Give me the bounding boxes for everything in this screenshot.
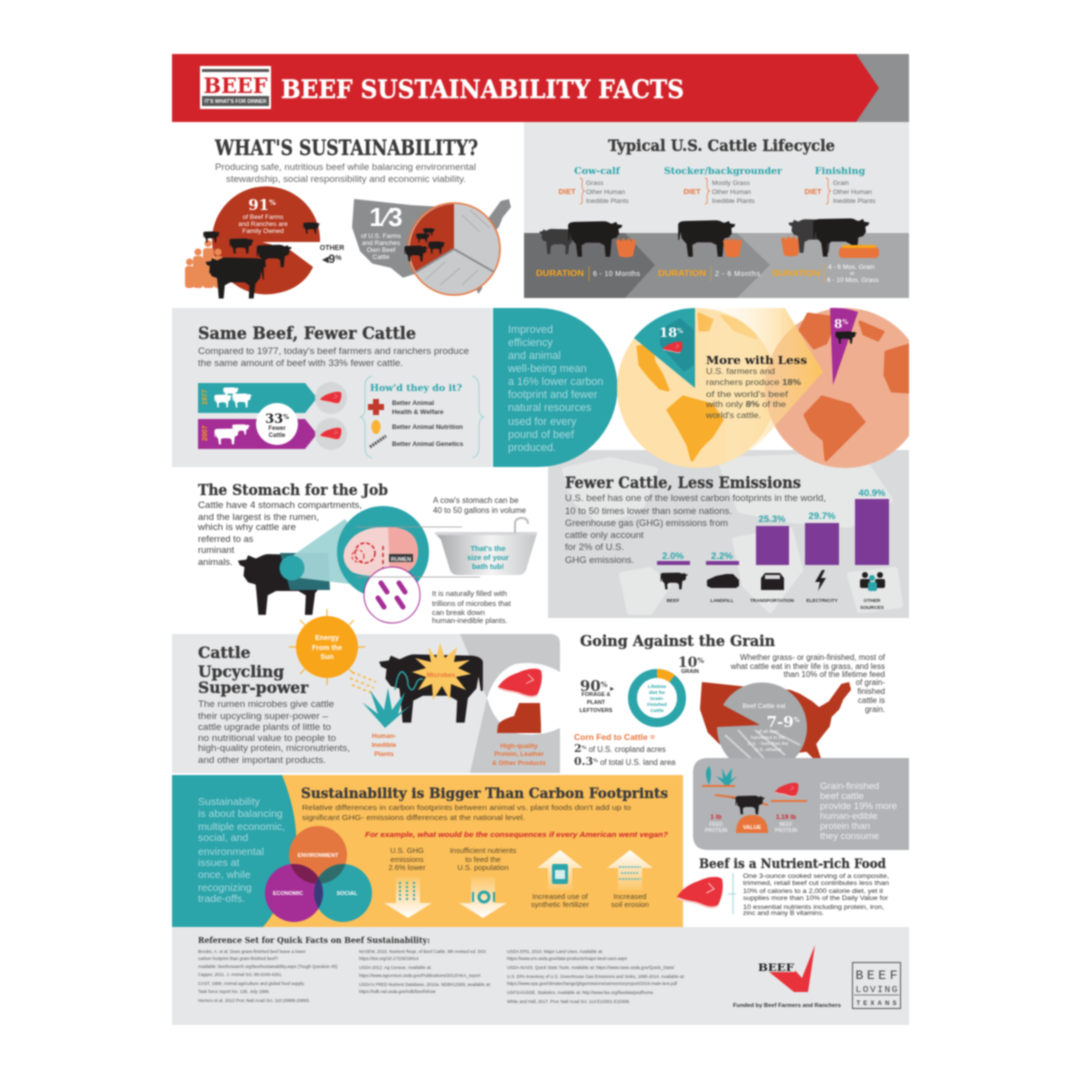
donut chart: 90 (580, 677, 601, 695)
body text: cattle upgrade plants of little to (198, 722, 331, 732)
body text: of grain- (856, 678, 885, 687)
teal bracket (728, 873, 736, 914)
icon: bathtub: size of your (467, 553, 509, 562)
body text: Greenhouse gas (GHG) emissions from (565, 518, 728, 529)
references column 1: Capper, 2011. J. Animal Sci. 89:4249-4261. (198, 972, 282, 977)
callout: how'd they do it: Better Animal (392, 400, 434, 407)
donut chart: FORAGE & (581, 692, 611, 698)
icon: cow with rumen zoom (238, 506, 429, 623)
stage: stocker/backgrounder: DIET (683, 187, 701, 196)
stage: finishing: Finishing (815, 166, 865, 177)
consequence: fertilizer: synthetic fertilizer (531, 900, 589, 909)
right globe 8% of cattle: % (842, 319, 848, 326)
map: one third own beef cattle: 1⁄3 (369, 202, 403, 232)
bar chart: GHG emissions (657, 488, 889, 565)
map: 7-9% of life: U.S. ethanol (755, 747, 781, 753)
label: products: & Other Products (492, 760, 546, 767)
icon: scale with cow (702, 766, 807, 834)
stats: corn fed to cattle: % (582, 745, 587, 751)
panel: what's sustainability (185, 135, 511, 299)
comparison bars: 33 (265, 412, 283, 427)
references column 1: Available: beefresearch.org/beefsustainability.aspx (Tough Question #5) (198, 964, 338, 969)
logo: beef loving texans: TEXANS (856, 1001, 896, 1007)
label: other 9%: OTHER (320, 245, 344, 252)
callout: how'd they do it: How'd they do it? (370, 383, 462, 394)
map: 7-9% of life (700, 682, 851, 773)
logo: BEEF It's What's For Dinner (200, 66, 271, 109)
body text: Whether grass- or grain-finished, most of (740, 653, 886, 662)
title: BEEF SUSTAINABILITY FACTS (281, 75, 684, 104)
text block: teal: is about balancing (198, 808, 283, 820)
map: 7-9% of life: of all corn (758, 729, 779, 735)
microbes circle (364, 567, 420, 623)
body text: Relative differences in carbon footprints between animal vs. plant foods don't add up to (302, 803, 631, 812)
globes: more with less (617, 308, 925, 468)
intro text: Producing safe, nutritious beef while balancing environmental (215, 162, 476, 172)
icon: scale with cow: FEED (709, 822, 723, 828)
icons and labels: ELECTRICITY (806, 598, 839, 604)
body text: animals. (198, 557, 233, 567)
consequence: fertilizer: Increased use of (532, 892, 589, 901)
stage: cow-calf: DIET (558, 187, 576, 196)
icon: grass plant (362, 688, 411, 728)
body text: 10% of calories to a 2,000 calorie diet, yet it (743, 888, 883, 895)
callout: how'd they do it (360, 376, 484, 458)
panel: going against the grain (574, 632, 909, 850)
icon: scale with cow: VALUE (743, 825, 761, 831)
references column 2: https://www.agcensus.usda.gov/Publications/2012/AKA_report (359, 973, 481, 978)
heading: what's sustainability: WHAT'S SUSTAINABILITY? (214, 135, 478, 160)
heading: Sustainability is Bigger Than Carbon Footprints (301, 786, 668, 802)
right globe 8% of cattle: 8 (834, 317, 842, 331)
body text: what cattle eat in their life is grass, and less (730, 662, 885, 671)
world map background (565, 455, 900, 612)
question: For example, what would be the consequences if every American went vegan? (365, 830, 668, 839)
panel: same beef, fewer cattle (172, 308, 492, 467)
text block: teal: once, while (198, 869, 251, 881)
comparison bars: 1977 (202, 389, 209, 405)
body text: for 2% of U.S. (565, 542, 624, 553)
stats: corn fed to cattle: 0.3 (574, 755, 598, 768)
consequence: soil erosion: soil erosion (611, 900, 649, 909)
consequence: insufficient nutrients: U.S. population (457, 863, 509, 872)
references column 2: https://ndb.nal.usda.gov/ndb/beef/show (359, 989, 436, 994)
references column 3: U.S. EPA Inventory of U.S. Greenhouse Gas Emissions and Sinks, 1990-2014. Available at: (507, 974, 685, 979)
body text: finished (857, 687, 885, 696)
body text: grain. (865, 705, 885, 714)
heading: Going Against the Grain (580, 632, 775, 650)
heading: Reference Set for Quick Facts on Beef Sustainability: (198, 935, 430, 945)
header banner (172, 54, 909, 122)
body text: zinc and many B vitamins. (743, 910, 824, 917)
stats: corn fed to cattle: 2 (574, 742, 587, 755)
text block: teal: multiple economic, (198, 821, 285, 833)
references column 2: NASEM, 2015. Nutrient Reqs. of Beef Cattle. 8th revised ed. DOI: (359, 949, 487, 954)
panel: beef is a nutrient-rich food (677, 857, 889, 917)
stats: corn fed to cattle: of total U.S. land area (598, 758, 676, 767)
durations: 6 - 10 Mos. Grass (827, 277, 879, 284)
icon: cow with microbes: Microbes (427, 672, 456, 679)
body text: The rumen microbes give cattle (198, 699, 334, 709)
heading: Same Beef, Fewer Cattle (198, 324, 416, 343)
bar chart: GHG emissions: 40.9% (859, 488, 886, 499)
left globe 18% of beef (617, 308, 777, 468)
callout: how'd they do it: Health & Welfare (392, 409, 444, 416)
stage: stocker/backgrounder: Other Human (712, 189, 751, 196)
map: one third own beef cattle: of U.S. Farms (361, 233, 402, 240)
note: gallons: A cow's stomach can be (433, 496, 519, 505)
text block: with only 8% of the (706, 399, 783, 409)
consequence: lower emissions: emissions (390, 855, 424, 864)
pie chart: 91% family owned: % (269, 198, 276, 207)
references column 1: Task force report No. 135. July 1999. (198, 989, 270, 994)
panel: carbon footprint statement: footprint and fewer (508, 389, 598, 401)
icons and labels: SOURCES (860, 605, 885, 611)
icon: scale with cow: PROTEIN (775, 828, 797, 834)
stage: cow-calf: Inedible Plants (586, 198, 629, 205)
body text: referred to as (198, 534, 254, 544)
panel: carbon footprint statement: pound of beef (508, 429, 575, 441)
stage: stocker/backgrounder: Mostly Grass (712, 180, 751, 187)
donut chart: Cattle (650, 708, 664, 714)
pie chart: 91% family owned (185, 186, 344, 299)
map: 7-9% of life: 7-9 (767, 713, 794, 731)
icon: steak (498, 669, 542, 697)
stage: cow-calf (558, 166, 629, 205)
bar chart: GHG emissions: 25.3% (759, 514, 786, 525)
pie chart: 91% family owned: of Beef Farms (243, 214, 284, 221)
label: other 9% (320, 245, 344, 266)
icon: boot (497, 703, 541, 733)
venn diagram: ENVIRONMENT (298, 853, 339, 859)
durations: or (850, 271, 855, 277)
body text: GHG emissions. (565, 555, 634, 566)
text block: teal: issues at (198, 857, 240, 869)
heading: Cattle (198, 643, 251, 662)
text block: teal: recognizing (198, 882, 252, 894)
durations: DURATION (536, 268, 584, 278)
donut chart: % (601, 680, 608, 689)
heading: Upcycling (198, 662, 284, 681)
map: one third own beef cattle: Own Beef (367, 247, 395, 254)
text block: teal: trade-offs. (198, 893, 245, 905)
consequence: lower emissions (384, 846, 432, 918)
comparison bars: 2007 (202, 425, 209, 441)
icon: scale with cow: PROTEIN (705, 828, 727, 834)
icon: scale with cow: 1 lb (710, 814, 722, 821)
icon: cow with rumen zoom: RUMEN (391, 557, 411, 563)
note: gallons: 40 to 50 gallons in volume (433, 506, 526, 515)
label: human-inedible plants: Plants (374, 751, 394, 758)
body text: no nutritional value to people to (198, 733, 336, 743)
stage: finishing: Other Human (833, 189, 872, 196)
text block: ranchers produce 18% (706, 377, 799, 387)
consequence: insufficient nutrients: Insufficient nutrients (450, 846, 517, 855)
label: other 9%: % (335, 255, 342, 262)
icon: scale with cow: 1.19 lb (776, 814, 796, 821)
donut chart: 10 (678, 655, 697, 671)
body text: 10 essential nutrients including protein, iron, (743, 904, 884, 911)
consequence: soil erosion: Increased (614, 892, 646, 901)
panel: grain-finished protein: they consume (820, 831, 879, 842)
donut chart: Grain- (650, 696, 664, 702)
panel: sustainability is bigger than carbon footprints (172, 775, 683, 927)
heading: Super-power (198, 678, 309, 697)
icons and labels (661, 570, 885, 611)
consequence: soil erosion (607, 850, 653, 909)
icon: steak (677, 877, 723, 907)
durations: DURATION (658, 268, 706, 278)
heading: The Stomach for the Job (198, 481, 388, 499)
body text: supplies more than 10% of the Daily Value for (743, 895, 889, 902)
logo: BEEF It's What's For Dinner: BEEF (204, 73, 268, 98)
donut chart: GRAIN (681, 669, 699, 675)
stats: corn fed to cattle: Corn Fed to Cattle = (574, 732, 655, 742)
note: microbes: can break down (432, 608, 485, 617)
body text: U.S. beef has one of the lowest carbon footprints in the world, (565, 493, 826, 504)
icons and labels: BEEF (667, 598, 679, 604)
sun energy dashes (350, 672, 376, 693)
body text: cattle only account (565, 530, 644, 541)
logo: BEEF It's What's For Dinner: IT'S WHAT'S FOR DINNER (204, 99, 267, 105)
body text: Cattle have 4 stomach compartments, (198, 500, 362, 510)
text block: of the world's beef (706, 389, 789, 399)
icons and labels: TRANSPORTATION (750, 598, 795, 604)
consequence: insufficient nutrients (450, 846, 517, 918)
left globe 18% of beef: % (677, 328, 683, 335)
body text: One 3-ounce cooked serving of a composite, (743, 873, 889, 880)
icon: bathtub (356, 518, 537, 577)
body text: and other important products. (198, 755, 326, 765)
comparison bars: Cattle (269, 433, 286, 439)
panel: carbon footprint statement: well-being mean (507, 363, 587, 375)
icon: bathtub: That's the (470, 544, 506, 553)
comparison bars: % (283, 414, 289, 421)
durations (536, 264, 879, 284)
heading: Beef is a Nutrient-rich Food (699, 857, 886, 872)
heading: Fewer Cattle, Less Emissions (565, 473, 801, 492)
donut chart: % (697, 656, 704, 665)
logo: BEEF check mark: Funded by Beef Farmers and Ranchers (733, 1003, 841, 1009)
logo: BEEF check mark (733, 945, 841, 1009)
stats: corn fed to cattle (574, 732, 676, 768)
body text: which is why cattle are (197, 522, 296, 532)
right globe 8% of cattle (765, 308, 925, 468)
stage: finishing: Grain (833, 180, 849, 187)
venn diagram: SOCIAL (337, 891, 358, 897)
panel: carbon footprint statement: and animal (508, 350, 561, 362)
donut chart (580, 655, 704, 722)
panel: carbon footprint statement: efficiency (508, 337, 553, 349)
panel: typical U.S. cattle lifecycle (524, 122, 909, 298)
panel: carbon footprint statement (493, 308, 618, 467)
bar chart: GHG emissions: 2.0% (662, 551, 684, 562)
text block: world's cattle. (705, 410, 761, 420)
donut chart: PLANT (587, 700, 606, 706)
icon: scale with cow: BEEF (779, 822, 793, 828)
logo: beef loving texans: BEEF (856, 968, 898, 983)
label: products: High-quality (500, 743, 538, 750)
references column 3: USFSA/USDE. Statistics. Available at: http://www.fas.org/fasdata/psd/home (507, 990, 654, 995)
icon: sun: Energy (315, 635, 339, 642)
stage: cow-calf: Grass (586, 180, 604, 187)
note: microbes: It is naturally filled with (432, 589, 507, 598)
label: human-inedible plants: Human- (372, 733, 396, 740)
note: microbes: trillions of microbes that (432, 599, 512, 608)
icons and labels: LANDFILL (710, 598, 734, 604)
icon: DNA (370, 436, 386, 447)
donut chart: LEFTOVERS (580, 708, 613, 714)
stage: finishing: DIET (804, 187, 822, 196)
label: products: Protein, Leather (494, 751, 544, 758)
consequence: fertilizer (531, 850, 589, 909)
map: one third own beef cattle: and Ranches (362, 240, 401, 247)
heading: More with Less (706, 354, 807, 367)
durations: DURATION (772, 268, 820, 278)
panel: carbon footprint statement: natural resources (508, 402, 592, 414)
references column 3: USDA ERS, 2010. Major Land Uses. Available at: (507, 949, 603, 954)
panel: carbon footprint statement: Improved (508, 324, 553, 336)
map: one third own beef cattle: Cattle (373, 254, 390, 261)
heading: lifecycle: Typical U.S. Cattle Lifecycle (608, 136, 835, 155)
references column 2: https://doi.org/10.17226/19014 (359, 956, 419, 961)
stage: stocker/backgrounder: Stocker/backgrounder (664, 166, 783, 177)
intro text: stewardship, social responsibility and economic viability. (226, 174, 466, 184)
callout: how'd they do it: Better Animal Genetics (392, 441, 464, 448)
icons: cattle and feed (539, 218, 879, 258)
map: 7-9% of life: % (794, 717, 800, 724)
icon: corn (372, 420, 380, 434)
donut chart: ▸ (607, 683, 614, 693)
body text: ruminant (198, 545, 235, 555)
references column 1: CAST, 1999. Animal agriculture and global food supply. (198, 981, 305, 986)
text block: teal: social, and (198, 832, 248, 844)
panel: references footer (172, 927, 909, 1025)
icon: sun: From the (312, 645, 342, 652)
pie chart: 91% family owned: and Ranches are (238, 221, 288, 228)
stage: stocker/backgrounder: Inedible Plants (712, 198, 755, 205)
map: 7-9% of life: Beef Cattle eat (742, 703, 786, 710)
pie chart: 91% family owned: Family Owned (242, 228, 284, 235)
panel: fewer cattle, less emissions (548, 450, 909, 618)
donut chart: Finished (647, 702, 667, 708)
icon: cattle on pie (203, 222, 320, 299)
logo: beef loving texans (852, 962, 900, 1008)
body text: cattle is (858, 696, 885, 705)
panel: carbon footprint statement: used for every (508, 416, 577, 428)
map: one third own beef cattle (352, 199, 511, 295)
donut chart: diet for (649, 690, 665, 696)
logo: BEEF check mark: BEEF (758, 963, 794, 974)
map: 7-9% of life: harvested in the (751, 735, 785, 741)
intro text: the same amount of beef with 33% fewer cattle. (198, 358, 403, 368)
icons and labels: OTHER (864, 598, 881, 604)
references column 1: Brooks, A. et al. Does grass-finished beef leave a lower (198, 949, 306, 954)
durations: 2 - 6 Months (715, 271, 760, 278)
panel: grain-finished protein: Grain-finished (820, 781, 879, 792)
left globe 18% of beef: 18 (659, 326, 677, 341)
body text: their upcycling super-power – (198, 711, 328, 721)
panel: the stomach for the job (197, 481, 537, 625)
intro text: Compared to 1977, today's beef farmers and ranchers produce (198, 346, 469, 356)
venn diagram: ECONOMIC (273, 891, 303, 897)
callout: how'd they do it: Better Animal Nutrition (392, 424, 463, 431)
icon: people silhouettes (185, 240, 223, 288)
text block: teal: environmental (198, 846, 264, 858)
donut chart: Lifetime (648, 684, 667, 690)
references column 2: USDA's FRED Nutrient Database, 2010a. NDB#13365; available at: (359, 982, 491, 987)
references column 1: Herrero et al. 2013 Proc Natl Acad Sci. 110:20888-20893. (198, 998, 310, 1003)
references column 3: USDA-NASS. Quick Stats Tools. Available at: https://www.nass.usda.gov/Quick_Stats/ (507, 965, 675, 970)
consequence: lower emissions: 2.6% lower (388, 863, 426, 872)
references column 2: USDA 2012. Ag Census. Available at: (359, 965, 432, 970)
bar chart: GHG emissions: 29.7% (809, 511, 836, 522)
durations: 6 - 10 Months (593, 271, 640, 278)
durations: 4 - 6 Mos. Grain (828, 264, 875, 271)
arrow: more with less (697, 308, 823, 462)
label: other 9%: ◂9 (323, 252, 335, 266)
text block: U.S. farmers and (706, 366, 775, 376)
panel: grain-finished protein: beef cattle (820, 791, 864, 802)
body text: and the largest is the rumen, (198, 512, 319, 522)
panel: grain-finished protein: provide 19% more (820, 801, 897, 812)
panel: grain-finished protein: human-edible (820, 811, 878, 822)
consequence: lower emissions: U.S. GHG (390, 846, 424, 855)
stage: finishing: Inedible Plants (833, 198, 876, 205)
comparison bars (198, 382, 347, 450)
body text: significant GHG- emissions differences at the national level. (302, 813, 525, 822)
references column 3: https://www.epa.gov/climatechange/ghgemissions/usinventoryreport/2016-main-text.pdf (507, 981, 678, 986)
consequence: insufficient nutrients: to feed the (465, 855, 501, 864)
body text: trimmed, retail beef cut contributes less than (743, 880, 889, 887)
panel: carbon footprint statement: produced. (508, 442, 556, 454)
icon: sun (289, 609, 365, 685)
text block: teal: Sustainability (198, 796, 261, 808)
body text: 10 to 50 times lower than some nations. (565, 506, 732, 517)
panel: carbon footprint statement: a 16% lower carbon (508, 376, 603, 388)
note: microbes: human-inedible plants. (432, 616, 507, 625)
panel: cattle upcycling super-power (172, 609, 560, 773)
panel: grain-finished protein (693, 758, 909, 850)
bar chart: GHG emissions: 2.2% (711, 551, 733, 562)
stage: stocker/backgrounder (664, 166, 783, 205)
stage: cow-calf: Cow-calf (574, 166, 621, 177)
icon: health cross (368, 399, 384, 415)
map: 7-9% of life: U.S. - less than the (748, 741, 789, 747)
body text: than 10% of the lifetime feed (784, 670, 885, 679)
comparison bars: Fewer (268, 426, 286, 432)
icon: sun: Sun (320, 654, 334, 661)
references column 3: White and Hall, 2017. Proc Natl Acad Sci. 114:E10301-E10308. (507, 999, 630, 1004)
logo: beef loving texans: LOVING (856, 984, 898, 995)
icon: bathtub: bath tub! (472, 562, 504, 571)
venn diagram (265, 826, 372, 922)
label: human-inedible plants: Inedible (372, 742, 397, 749)
body text: high-quality protein, micronutrients, (198, 743, 350, 753)
references column 3: https://www.ers.usda.gov/data-products/major-land-uses.aspx (507, 956, 628, 961)
pie chart: 91% family owned: 91 (248, 196, 269, 214)
stage: cow-calf: Other Human (586, 189, 625, 196)
panel: grain-finished protein: protein than (820, 821, 870, 832)
stats: corn fed to cattle: of U.S. cropland acres (586, 745, 666, 754)
stats: corn fed to cattle: % (593, 758, 598, 764)
icon: cow with microbes (379, 643, 483, 723)
stage: finishing (804, 166, 876, 205)
references column 1: carbon footprint than grain-finished beef? (198, 956, 279, 961)
